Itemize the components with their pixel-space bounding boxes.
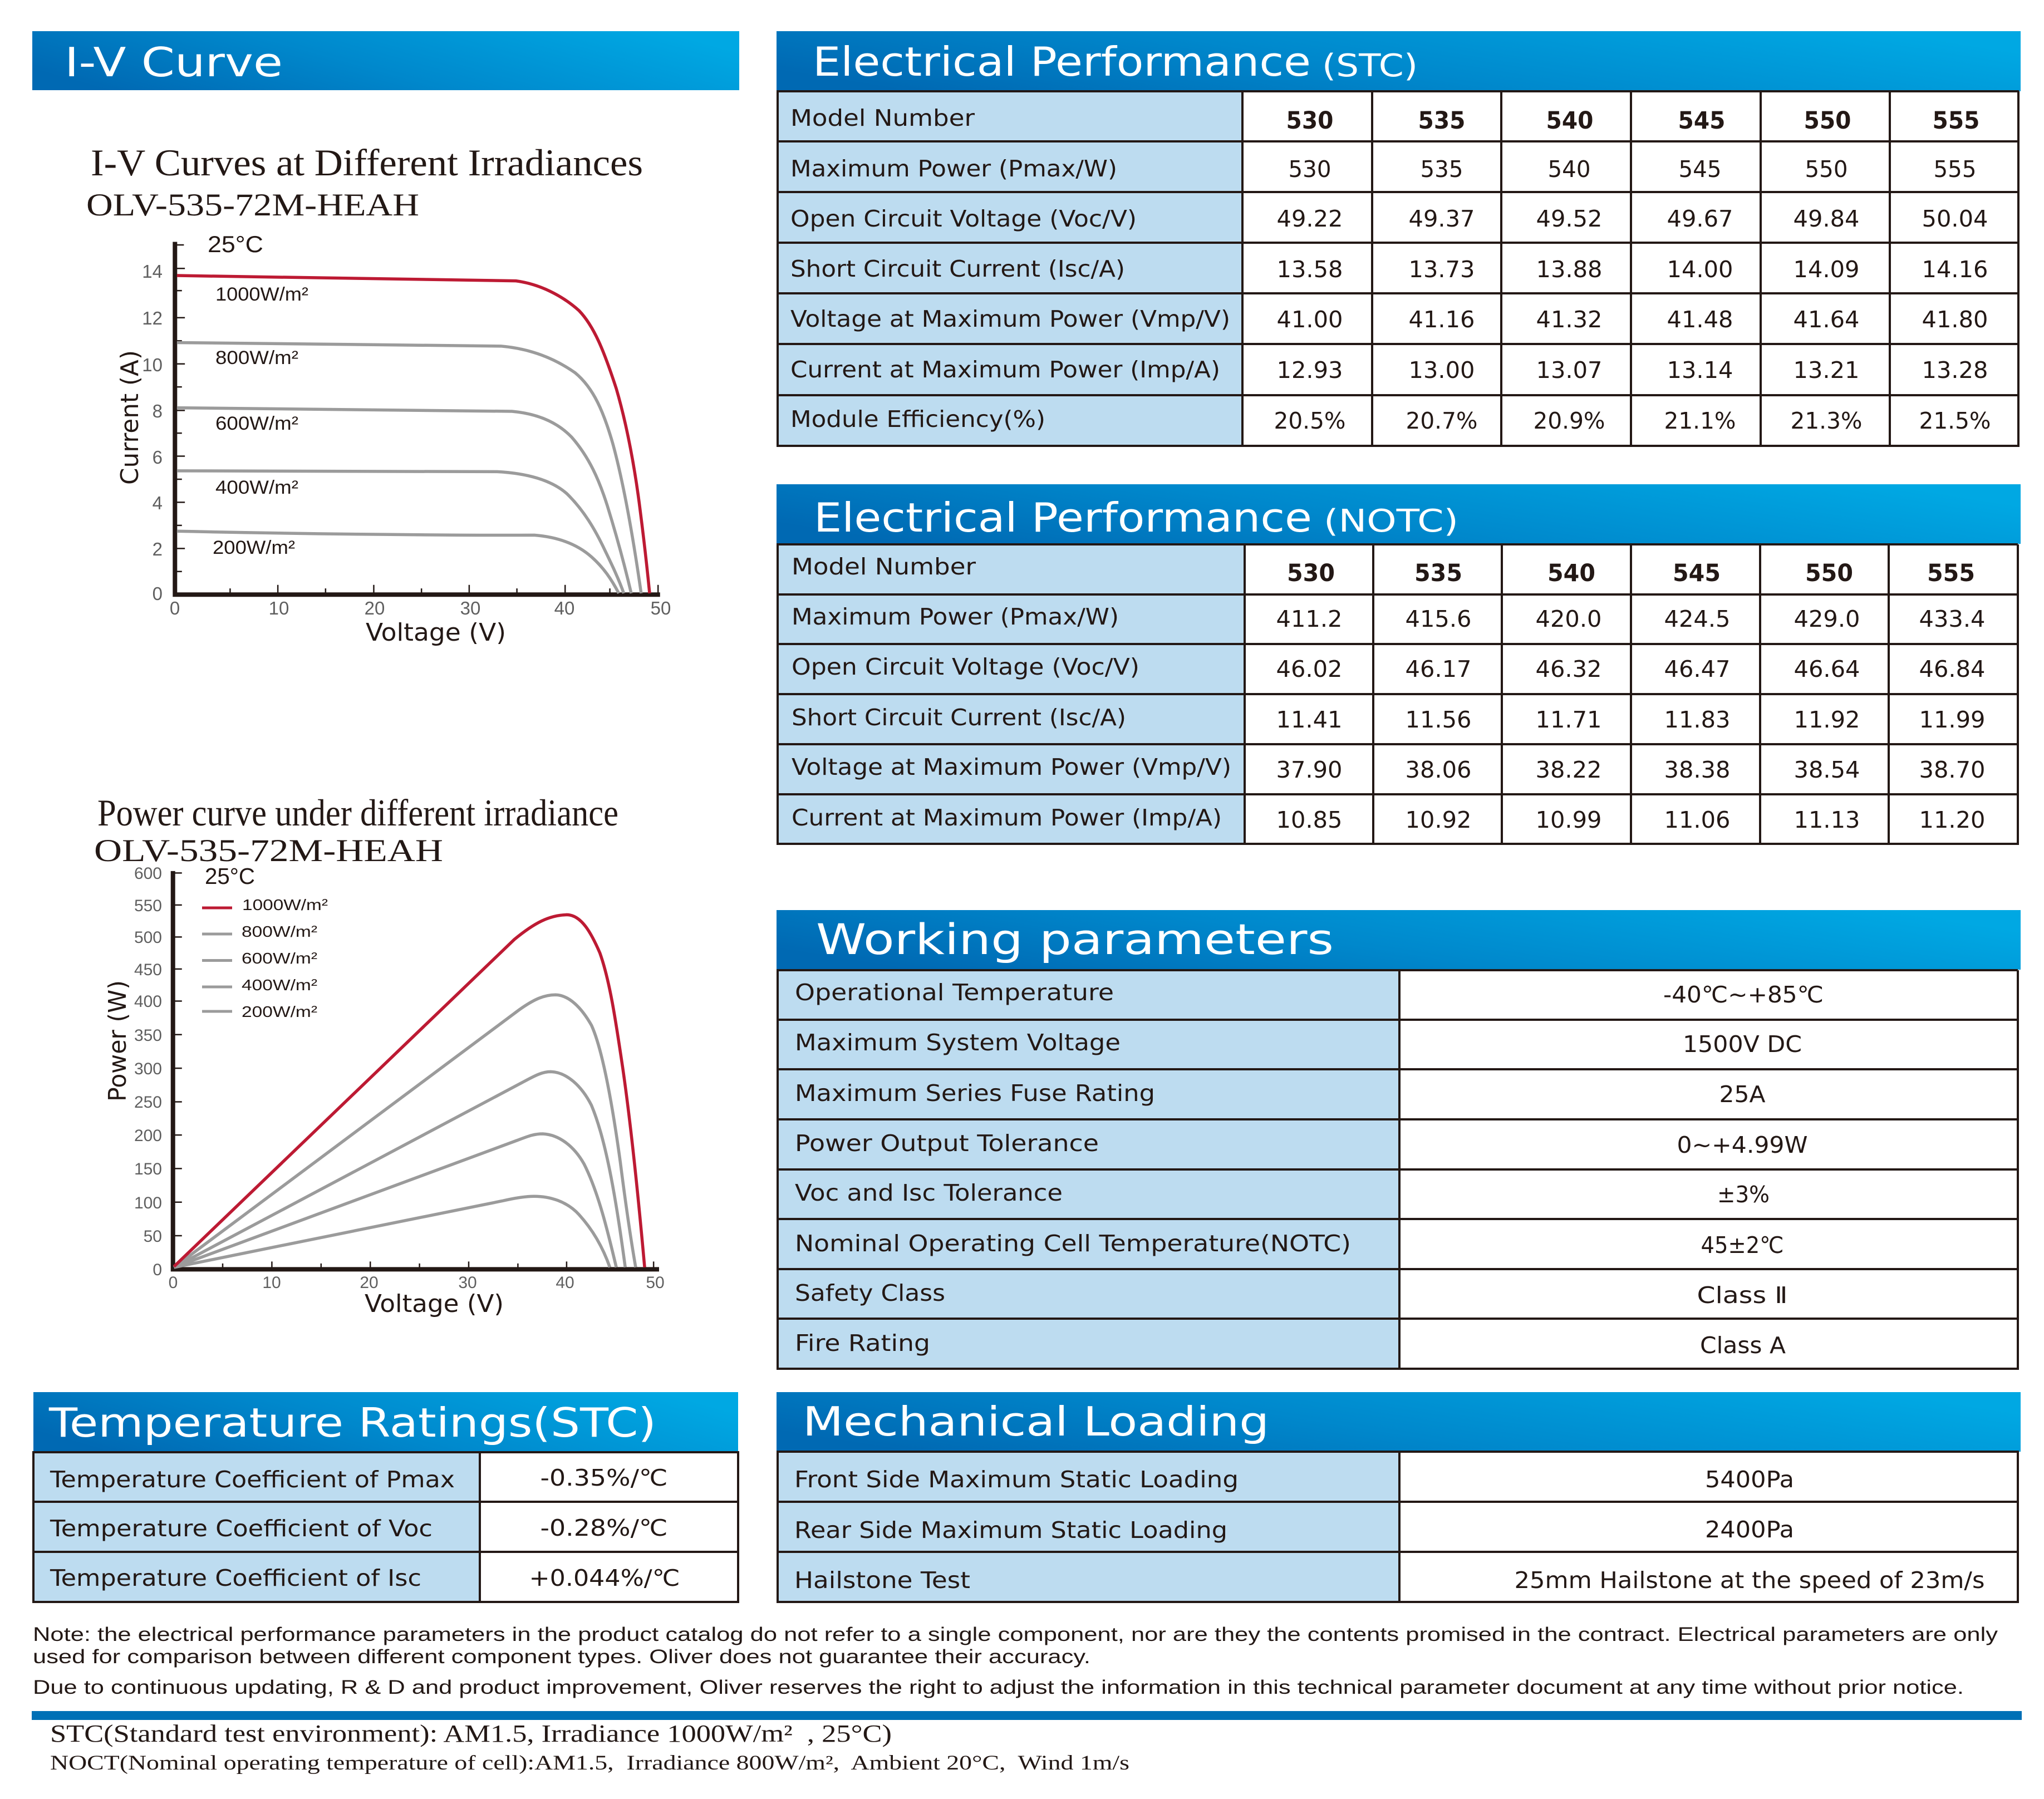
- row: voc and isc tolerance: [795, 1179, 1770, 1208]
- y axis labels: 4: [153, 493, 163, 513]
- header: [777, 910, 2021, 970]
- y axis labels: 10: [142, 355, 163, 375]
- label column background: [778, 1452, 1399, 1602]
- panel: Temperature Ratings: [33, 1392, 738, 1603]
- row: fire rating: [795, 1330, 1786, 1359]
- row: rear side loading: Rear Side Maximum Static Loading: [794, 1517, 1227, 1544]
- row: Voc coefficient: [50, 1515, 667, 1542]
- row: Isc coefficient: [50, 1565, 680, 1591]
- row: maximum power: 411.2: [1276, 606, 1343, 632]
- row: hailstone test: [794, 1567, 1985, 1594]
- y axis labels: 350: [134, 1026, 162, 1045]
- row: model number: 550: [1804, 107, 1851, 135]
- row: open circuit voltage: 46.64: [1794, 656, 1860, 682]
- table grid: [33, 1451, 738, 1603]
- row: maximum power: Maximum Power (Pmax/W): [792, 603, 1119, 630]
- disclaimer note: Note: the electrical performance parameters in the product catalog do not refer to a single component, nor are they the contents promised in the contract. Electrical parameters are only: [33, 1624, 1998, 1645]
- row: rear side loading: 2400Pa: [1705, 1516, 1794, 1543]
- y axis labels: [142, 261, 163, 604]
- label column background: [778, 970, 1399, 1369]
- panel: Mechanical Loading: [777, 1392, 2021, 1603]
- row: short circuit current: 11.99: [1919, 706, 1985, 733]
- y axis labels: 12: [142, 308, 163, 328]
- y axis labels: 500: [134, 928, 162, 947]
- y axis labels: 6: [153, 447, 163, 468]
- row: model number: 545: [1673, 559, 1721, 587]
- chart title: I-V curves: OLV-535-72M-HEAH: [86, 188, 419, 223]
- panel: Electrical Performance NOTC: [777, 484, 2021, 845]
- x axis labels: 50: [646, 1274, 665, 1292]
- row: model number: 555: [1927, 559, 1975, 587]
- curves: [177, 276, 650, 593]
- row: current at maximum power: 11.06: [1664, 807, 1730, 833]
- row: voltage at maximum power: [792, 754, 1985, 783]
- row: current at maximum power: 10.85: [1276, 807, 1343, 833]
- row: short circuit current: Short Circuit Current (Isc/A): [790, 255, 1125, 282]
- row: current at maximum power: 11.13: [1794, 807, 1860, 833]
- row: short circuit current: 13.58: [1277, 256, 1343, 283]
- row: power output tolerance: Power Output Tolerance: [795, 1130, 1099, 1157]
- header: Electrical Performance: [813, 38, 1311, 85]
- table grid: [778, 90, 2019, 447]
- row: operational temperature: Operational Temperature: [795, 979, 1114, 1006]
- footnote: test conditions: [50, 1720, 1129, 1775]
- header: I-V Curve: I-V Curve: [65, 39, 283, 86]
- row: fire rating: Fire Rating: [795, 1330, 930, 1356]
- x axis labels: 30: [460, 598, 480, 618]
- row: model number: 555: [1933, 107, 1979, 135]
- line chart: power curves: [104, 863, 665, 1318]
- legend: 800W/m²: [242, 923, 317, 940]
- x axis labels: 10: [269, 598, 289, 618]
- y axis labels: 200: [134, 1127, 162, 1145]
- header: [33, 1392, 738, 1452]
- row: maximum power: 535: [1421, 156, 1463, 183]
- row: current at maximum power: 12.93: [1277, 357, 1343, 384]
- row: maximum power: 415.6: [1405, 606, 1472, 632]
- row: voltage at maximum power: 41.16: [1408, 306, 1475, 333]
- row: current at maximum power: [792, 804, 1985, 833]
- row: safety class: [795, 1280, 1788, 1309]
- row: open circuit voltage: 49.67: [1667, 205, 1733, 232]
- row: nominal operating cell temperature: Nominal Operating Cell Temperature(NOTC): [795, 1230, 1351, 1257]
- row: open circuit voltage: 50.04: [1922, 205, 1988, 232]
- row: fire rating: Class A: [1700, 1332, 1786, 1359]
- row: current at maximum power: 13.00: [1408, 357, 1475, 384]
- x axis labels: 30: [458, 1274, 477, 1292]
- header: Working parameters: [816, 915, 1334, 964]
- row: nominal operating cell temperature: 45±2℃: [1701, 1232, 1783, 1259]
- row: current at maximum power: 13.28: [1922, 357, 1988, 384]
- row: maximum series fuse rating: 25A: [1719, 1081, 1766, 1108]
- table grid: [778, 1451, 2018, 1603]
- row: short circuit current: 11.56: [1405, 706, 1472, 733]
- header: I-V Curve: [32, 31, 739, 90]
- header: (STC): [1322, 48, 1418, 84]
- row: open circuit voltage: 46.32: [1535, 656, 1602, 682]
- row: current at maximum power: 11.20: [1919, 807, 1985, 833]
- row: short circuit current: 14.00: [1667, 256, 1733, 283]
- row: short circuit current: 14.16: [1922, 256, 1988, 283]
- row: maximum power: 424.5: [1664, 606, 1730, 632]
- row: current at maximum power: 10.99: [1535, 807, 1602, 833]
- axis title: voltage: Voltage (V): [365, 1290, 504, 1318]
- axis title: power: Power (W): [104, 980, 132, 1102]
- row: module efficiency: 21.5%: [1919, 407, 1991, 434]
- row: maximum series fuse rating: Maximum Series Fuse Rating: [795, 1080, 1155, 1107]
- row: model number: 540: [1547, 559, 1595, 587]
- y axis labels: 250: [134, 1093, 162, 1112]
- row: short circuit current: 11.71: [1535, 706, 1602, 733]
- row: open circuit voltage: 49.22: [1277, 205, 1343, 232]
- row: operational temperature: [795, 979, 1824, 1008]
- row: Pmax coefficient: -0.35%/℃: [540, 1464, 668, 1491]
- row: short circuit current: 11.92: [1794, 706, 1860, 733]
- legend: [202, 896, 328, 1020]
- row: open circuit voltage: 46.02: [1276, 656, 1343, 682]
- row: short circuit current: 14.09: [1794, 256, 1859, 283]
- row: short circuit current: 11.83: [1664, 706, 1730, 733]
- row: voltage at maximum power: 38.22: [1535, 756, 1602, 783]
- row: model number: 545: [1678, 107, 1726, 135]
- row: voltage at maximum power: 38.06: [1405, 756, 1472, 783]
- y axis labels: 450: [134, 961, 162, 979]
- header: (NOTC): [1324, 503, 1458, 539]
- curve labels: [213, 284, 308, 558]
- row: module efficiency: Module Efficiency(%): [790, 406, 1045, 432]
- row: model number: [790, 105, 1979, 135]
- row: voltage at maximum power: 38.70: [1919, 756, 1985, 783]
- row: maximum power: 555: [1934, 156, 1976, 183]
- row: model number: 540: [1546, 107, 1593, 135]
- y axis labels: 600: [134, 864, 162, 883]
- panel: Electrical Performance STC: [777, 31, 2021, 447]
- row: open circuit voltage: Open Circuit Voltage (Voc/V): [790, 205, 1137, 232]
- table grid: [778, 543, 2018, 845]
- row: module efficiency: 20.9%: [1533, 407, 1605, 434]
- y axis labels: 550: [134, 897, 162, 915]
- chart title: I-V curves: [86, 141, 643, 223]
- row: open circuit voltage: [792, 653, 1985, 682]
- row: maximum power: 545: [1679, 156, 1721, 183]
- x axis labels: 10: [262, 1274, 281, 1292]
- row: model number: 530: [1286, 107, 1334, 135]
- row: maximum power: 429.0: [1794, 606, 1860, 632]
- row: short circuit current: [792, 704, 1985, 733]
- row: module efficiency: 21.3%: [1790, 407, 1863, 434]
- legend: 200W/m²: [242, 1003, 317, 1020]
- row: current at maximum power: 13.14: [1667, 357, 1733, 384]
- header: [777, 484, 2021, 544]
- x axis labels: 40: [554, 598, 574, 618]
- curves: [174, 915, 645, 1267]
- legend: 400W/m²: [242, 976, 317, 994]
- row: front side loading: 5400Pa: [1705, 1466, 1794, 1493]
- row: Voc coefficient: Temperature Coefficient of Voc: [50, 1515, 433, 1542]
- row: model number: 550: [1805, 559, 1853, 587]
- row: open circuit voltage: 49.84: [1794, 205, 1859, 232]
- row: open circuit voltage: 46.17: [1405, 656, 1472, 682]
- row: short circuit current: 13.73: [1408, 256, 1475, 283]
- legend: 1000W/m²: [242, 896, 328, 913]
- label column background: [778, 91, 1242, 446]
- x axis labels: 50: [651, 598, 671, 618]
- row: maximum system voltage: [795, 1029, 1802, 1058]
- axis title: voltage: Voltage (V): [366, 618, 506, 647]
- row: model number: 535: [1414, 559, 1462, 587]
- chart title: power curves: OLV-535-72M-HEAH: [94, 833, 443, 868]
- row: rear side loading: [794, 1516, 1794, 1544]
- x axis labels: [169, 1274, 665, 1292]
- x axis labels: 40: [556, 1274, 574, 1292]
- row: safety class: Class Ⅱ: [1697, 1282, 1788, 1309]
- row: voc and isc tolerance: ±3%: [1717, 1181, 1770, 1208]
- row: short circuit current: Short Circuit Current (Isc/A): [792, 704, 1126, 731]
- row: voltage at maximum power: Voltage at Maximum Power (Vmp/V): [792, 754, 1231, 780]
- x axis labels: 0: [169, 1274, 178, 1292]
- row: hailstone test: Hailstone Test: [794, 1567, 970, 1594]
- y axis labels: 2: [153, 539, 163, 559]
- row: Voc coefficient: -0.28%/℃: [540, 1515, 668, 1541]
- row: open circuit voltage: 46.84: [1919, 656, 1985, 682]
- row: model number: 530: [1287, 559, 1335, 587]
- row: module efficiency: 20.7%: [1406, 407, 1477, 434]
- x axis labels: 0: [170, 598, 180, 618]
- row: voltage at maximum power: 38.38: [1664, 756, 1730, 783]
- x axis labels: 20: [360, 1274, 379, 1292]
- row: module efficiency: 21.1%: [1664, 407, 1736, 434]
- row: maximum power: 420.0: [1535, 606, 1602, 632]
- row: current at maximum power: Current at Maximum Power (Imp/A): [792, 804, 1222, 831]
- row: voltage at maximum power: [790, 306, 1988, 333]
- row: short circuit current: 11.41: [1276, 706, 1343, 733]
- row: model number: [792, 553, 1975, 587]
- row: voltage at maximum power: 41.00: [1277, 306, 1343, 333]
- row: model number: Model Number: [792, 553, 976, 580]
- footnote: test conditions: NOCT(Nominal operating temperature of cell):AM1.5, Irradiance 800W/m², Ambient 20°C, Wind 1m/s: [50, 1752, 1129, 1775]
- label column background: [778, 544, 1245, 844]
- y axis labels: 8: [153, 401, 163, 421]
- x axis labels: [170, 598, 671, 618]
- row: short circuit current: 13.88: [1536, 256, 1602, 283]
- header: Electrical Performance: [814, 494, 1312, 541]
- panel: Working parameters: [777, 910, 2021, 1370]
- y axis labels: [134, 864, 162, 1279]
- curve labels: 1000W/m²: [215, 284, 308, 305]
- header: Temperature Ratings(STC): [48, 1399, 656, 1446]
- row: open circuit voltage: 49.52: [1536, 205, 1602, 232]
- row: current at maximum power: [790, 356, 1988, 384]
- row: maximum power: [790, 155, 1976, 183]
- row: current at maximum power: Current at Maximum Power (Imp/A): [790, 356, 1220, 383]
- axes and ticks: [175, 242, 660, 594]
- curve labels: 200W/m²: [213, 537, 295, 558]
- y axis labels: 150: [134, 1160, 162, 1178]
- row: front side loading: [794, 1466, 1794, 1493]
- y axis labels: 0: [153, 583, 163, 604]
- x axis labels: 20: [365, 598, 385, 618]
- row: front side loading: Front Side Maximum Static Loading: [794, 1466, 1239, 1493]
- row: maximum power: 530: [1288, 156, 1331, 183]
- y axis labels: 0: [153, 1261, 162, 1279]
- row: Isc coefficient: +0.044%/℃: [529, 1565, 680, 1591]
- row: current at maximum power: 10.92: [1405, 807, 1472, 833]
- y axis labels: 14: [142, 261, 163, 282]
- row: power output tolerance: 0~+4.99W: [1677, 1132, 1808, 1158]
- row: short circuit current: [790, 255, 1988, 283]
- temperature label: 25°C: [205, 863, 255, 889]
- row: operational temperature: -40℃~+85℃: [1663, 981, 1824, 1008]
- row: maximum system voltage: Maximum System Voltage: [795, 1029, 1121, 1056]
- row: open circuit voltage: [790, 205, 1988, 232]
- disclaimer note: used for comparison between different component types. Oliver does not guarantee their accuracy.: [33, 1646, 1090, 1668]
- disclaimer note: Due to continuous updating, R & D and product improvement, Oliver reserves the right to adjust the information in this technical parameter document at any time without prior notice.: [33, 1677, 1964, 1698]
- row: Pmax coefficient: [50, 1464, 668, 1493]
- row: voltage at maximum power: 41.80: [1922, 306, 1988, 333]
- disclaimer note: [33, 1624, 1998, 1698]
- row: safety class: Safety Class: [795, 1280, 945, 1306]
- row: nominal operating cell temperature: [795, 1230, 1783, 1259]
- temperature label: 25°C: [208, 231, 263, 257]
- row: Pmax coefficient: Temperature Coefficient of Pmax: [50, 1466, 455, 1493]
- row: maximum power: 550: [1805, 156, 1848, 183]
- row: voltage at maximum power: Voltage at Maximum Power (Vmp/V): [790, 306, 1230, 332]
- curve labels: 400W/m²: [215, 477, 298, 498]
- row: maximum power: Maximum Power (Pmax/W): [790, 155, 1117, 182]
- row: voc and isc tolerance: Voc and Isc Tolerance: [795, 1179, 1063, 1206]
- header: [777, 31, 2021, 91]
- row: open circuit voltage: 46.47: [1664, 656, 1730, 682]
- y axis labels: 400: [134, 992, 162, 1011]
- row: voltage at maximum power: 41.32: [1536, 306, 1602, 333]
- y axis labels: 100: [134, 1194, 162, 1212]
- row: Isc coefficient: Temperature Coefficient of Isc: [50, 1565, 421, 1591]
- row: module efficiency: 20.5%: [1274, 407, 1346, 434]
- line chart: I-V curves: [116, 231, 671, 647]
- footnote: test conditions: STC(Standard test environment): AM1.5, Irradiance 1000W/m² , 25°C): [50, 1720, 892, 1747]
- chart title: power curves: [94, 792, 618, 868]
- row: maximum power: 433.4: [1919, 606, 1985, 632]
- row: voltage at maximum power: 41.48: [1667, 306, 1733, 333]
- row: maximum system voltage: 1500V DC: [1683, 1031, 1802, 1058]
- chart title: power curves: Power curve under different irradiance: [97, 792, 618, 834]
- footer divider bar: [32, 1711, 2022, 1720]
- y axis labels: 50: [144, 1227, 162, 1246]
- row: model number: Model Number: [790, 105, 975, 131]
- curve labels: 600W/m²: [215, 413, 298, 434]
- row: hailstone test: 25mm Hailstone at the speed of 23m/s: [1514, 1567, 1985, 1594]
- row: model number: 535: [1418, 107, 1465, 135]
- row: module efficiency: [790, 406, 1991, 434]
- row: voltage at maximum power: 38.54: [1794, 756, 1860, 783]
- row: current at maximum power: 13.21: [1794, 357, 1859, 384]
- curve labels: 800W/m²: [215, 347, 298, 368]
- row: power output tolerance: [795, 1130, 1808, 1158]
- axes and ticks: [173, 871, 659, 1269]
- row: open circuit voltage: Open Circuit Voltage (Voc/V): [792, 653, 1139, 680]
- header: [777, 1392, 2021, 1452]
- legend: 600W/m²: [242, 950, 317, 967]
- axis title: current: Current (A): [116, 350, 144, 485]
- row: maximum power: 540: [1547, 156, 1591, 183]
- y axis labels: 300: [134, 1060, 162, 1078]
- chart title: I-V curves: I-V Curves at Different Irradiances: [91, 141, 643, 184]
- header: Mechanical Loading: [803, 1398, 1269, 1445]
- row: voltage at maximum power: 41.64: [1794, 306, 1859, 333]
- row: current at maximum power: 13.07: [1536, 357, 1602, 384]
- row: voltage at maximum power: 37.90: [1276, 756, 1343, 783]
- table grid: [778, 969, 2018, 1370]
- label column background: [33, 1452, 480, 1602]
- row: maximum series fuse rating: [795, 1080, 1766, 1108]
- row: maximum power: [792, 603, 1985, 632]
- row: open circuit voltage: 49.37: [1408, 205, 1475, 232]
